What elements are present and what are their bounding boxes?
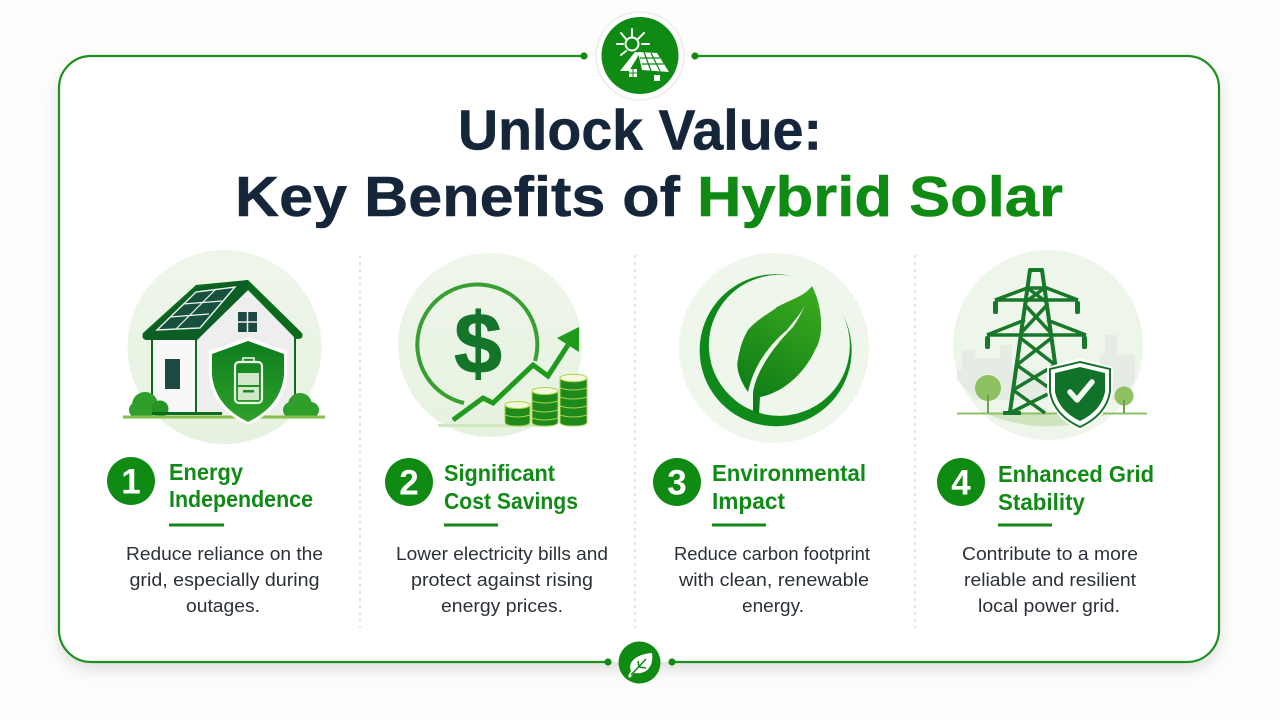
column 2: significant cost savings: energy prices. [441, 595, 563, 616]
column 4: enhanced grid stability: Stability [998, 489, 1085, 515]
column 3: environmental impact [653, 458, 870, 616]
title: Hybrid Solar [697, 165, 1063, 229]
icon: solar roof badge [596, 12, 684, 100]
column 2: significant cost savings: Lower electricity bills and [396, 543, 608, 564]
icon: dollar, growth arrow and coins [398, 253, 587, 437]
column 3: environmental impact: energy. [742, 595, 804, 616]
title: Unlock Value: [458, 98, 822, 162]
column 2: significant cost savings [385, 458, 608, 616]
icon: leaf in ring [679, 253, 869, 443]
dashed column dividers [360, 255, 915, 628]
title [235, 98, 1063, 229]
title: Key Benefits of [235, 165, 681, 229]
column 3: environmental impact: Impact [712, 488, 785, 514]
column 1: energy independence: Energy [169, 459, 243, 485]
column 4: enhanced grid stability: Enhanced Grid [998, 461, 1154, 487]
column 4: enhanced grid stability: local power grid. [978, 595, 1120, 616]
column 4: enhanced grid stability [937, 458, 1154, 616]
column 3: environmental impact: Environmental [712, 460, 866, 486]
column 1: energy independence: Independence [169, 486, 313, 512]
icon: bottom leaf badge [618, 642, 660, 684]
column 1: energy independence: outages. [186, 595, 260, 616]
column 2: significant cost savings: protect against rising [411, 569, 593, 590]
column 1: energy independence [107, 457, 323, 616]
icon: pylon with shield [953, 250, 1147, 440]
column 4: enhanced grid stability: 4 [951, 464, 971, 502]
column 3: environmental impact: with clean, renewable [678, 569, 869, 590]
column 4: enhanced grid stability: Contribute to a more [962, 543, 1138, 564]
column 3: environmental impact: 3 [667, 464, 687, 502]
column 2: significant cost savings: 2 [399, 464, 419, 502]
icon: dollar, growth arrow and coins: $ [454, 296, 502, 392]
column 4: enhanced grid stability: reliable and resilient [964, 569, 1136, 590]
panel: main frame [59, 52, 1219, 666]
column 1: energy independence: Reduce reliance on the [126, 543, 323, 564]
column 1: energy independence: grid, especially during [130, 569, 320, 590]
column 1: energy independence: 1 [121, 462, 141, 502]
column 2: significant cost savings: Cost Savings [444, 488, 578, 514]
column 3: environmental impact: Reduce carbon footprint [674, 543, 870, 564]
column 2: significant cost savings: Significant [444, 460, 555, 486]
icon: house with battery shield [123, 250, 325, 444]
